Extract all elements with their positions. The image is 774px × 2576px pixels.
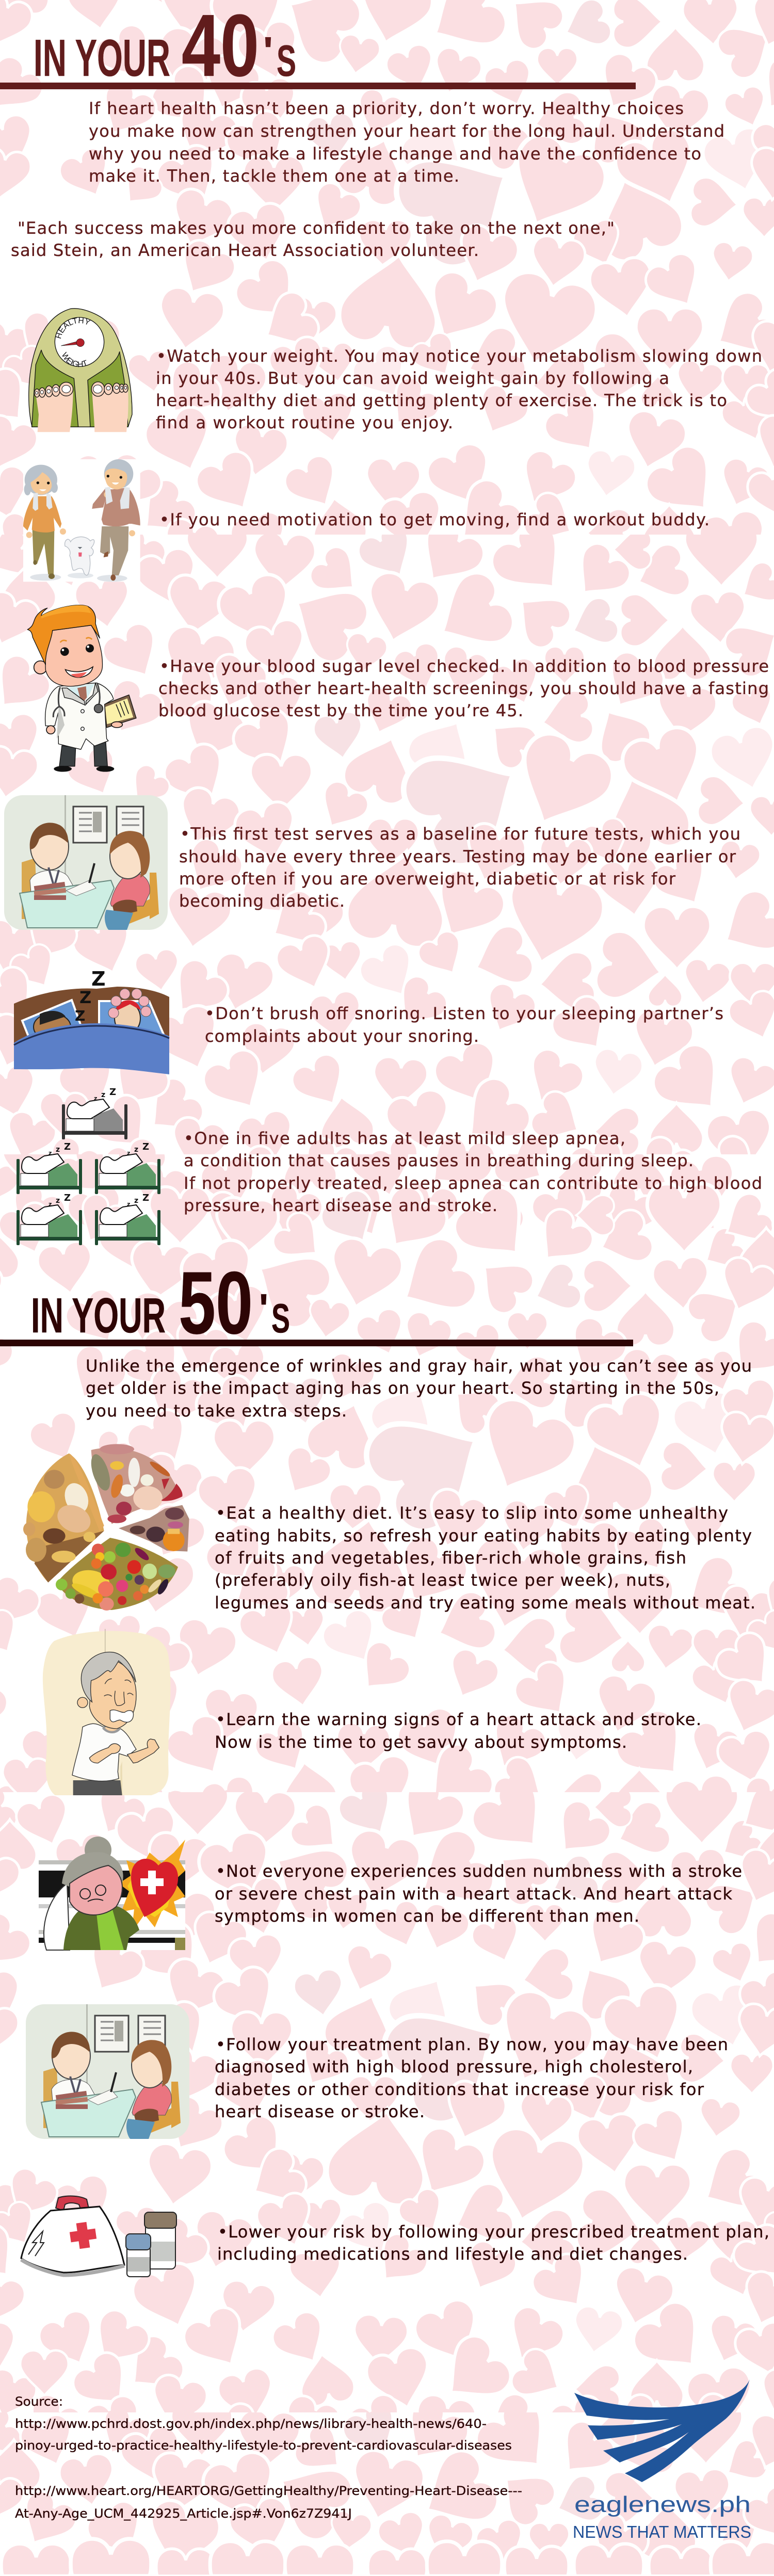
icon: couple in bed, snoring: Z: [91, 968, 106, 990]
text: 50s introduction: [86, 1356, 752, 1421]
heading rule 50s: [0, 1340, 633, 1346]
icon: doctor consultation scene: [4, 795, 168, 930]
text: snoring: [205, 1004, 723, 1046]
text: healthy diet: of fruits and vegetables, fiber-rich whole grains, fish: [215, 1548, 686, 1568]
text: blood sugar: blood glucose test by the time you’re 45.: [158, 701, 523, 720]
text: watch your weight: •Watch your weight. You may notice your metabolism slowing down: [156, 346, 762, 366]
icon: woman with heart pain: [39, 1837, 185, 1950]
text: first test baseline: [179, 824, 740, 911]
logo: eagle news: NEWS THAT MATTERS: [573, 2522, 751, 2541]
text: 40s introduction: [89, 99, 724, 186]
icon: medical kit and pill bottles: [21, 2196, 176, 2277]
text: 40s introduction: why you need to make a lifestyle change and have the confidence to: [89, 144, 701, 164]
text: watch your weight: heart-healthy diet and getting plenty of exercise. The trick is to: [156, 391, 727, 410]
heading: In Your 40's: [34, 0, 296, 95]
text: lower your risk: •Lower your risk by following your prescribed treatment plan,: [218, 2222, 769, 2242]
text: 40s introduction: If heart health hasn’t been a priority, don’t worry. Healthy choices: [89, 99, 684, 118]
icon: healthy weight scale: WEIGHT: [62, 352, 87, 367]
icon: healthy weight scale: [28, 308, 133, 432]
text: Stein quote: "Each success makes you more confident to take on the next one,": [18, 218, 615, 238]
text: healthy diet: (preferably oily fish-at least twice per week), nuts,: [215, 1570, 670, 1590]
text: sleep apnea: pressure, heart disease and stroke.: [184, 1196, 497, 1215]
text: stroke and heart attack symptoms: or severe chest pain with a heart attack. And heart attack: [215, 1884, 732, 1904]
icon: couple in bed, snoring: [14, 968, 169, 1074]
text: healthy diet: eating habits, so refresh your eating habits by eating plenty: [215, 1526, 752, 1545]
text: sleep apnea: a condition that causes pauses in breathing during sleep.: [184, 1151, 694, 1170]
icon: couple in bed, snoring: Z: [79, 988, 91, 1007]
text: stroke and heart attack symptoms: symptoms in women can be different than men.: [215, 1906, 639, 1926]
text: blood sugar: [158, 656, 769, 720]
text: sources: pinoy-urged-to-practice-healthy-lifestyle-to-prevent-cardiovascular-diseases: [15, 2438, 512, 2453]
text: treatment plan: heart disease or stroke.: [215, 2102, 425, 2121]
text: snoring: complaints about your snoring.: [205, 1026, 479, 1046]
heading: In Your 50's: [31, 1253, 290, 1353]
text: 40s introduction: make it. Then, tackle them one at a time.: [89, 166, 459, 186]
text: first test baseline: becoming diabetic.: [179, 891, 345, 911]
text: watch your weight: in your 40s. But you can avoid weight gain by following a: [156, 368, 669, 388]
text: sources: http://www.heart.org/HEARTORG/GettingHealthy/Preventing-Heart-Disease---: [15, 2484, 522, 2498]
text: sleep apnea: If not properly treated, sleep apnea can contribute to high blood: [184, 1173, 762, 1193]
text: first test baseline: more often if you are overweight, diabetic or at risk for: [179, 869, 676, 889]
icon: doctor consultation scene, repeated: [26, 2004, 189, 2139]
text: Stein quote: said Stein, an American Heart Association volunteer.: [11, 240, 479, 260]
text: 50s introduction: get older is the impact aging has on your heart. So starting in the 50s,: [86, 1378, 719, 1398]
heading: In Your 50's: 50: [179, 1253, 253, 1353]
text: 50s introduction: you need to take extra steps.: [86, 1401, 347, 1421]
text: healthy diet: legumes and seeds and try eating some meals without meat.: [215, 1593, 755, 1613]
text: lower your risk: [217, 2222, 769, 2264]
text: sleep apnea: [184, 1129, 762, 1215]
text: sleep apnea: •One in five adults has at least mild sleep apnea,: [184, 1129, 625, 1148]
heading: In Your 40's: IN YOUR: [34, 29, 170, 87]
text: watch your weight: [156, 346, 762, 432]
text: sources: Source:: [15, 2394, 63, 2409]
text: first test baseline: should have every three years. Testing may be done earlier or: [179, 847, 736, 866]
text: warning signs: [215, 1710, 701, 1752]
icon: food groups plate: [23, 1444, 189, 1611]
heading rule 40s: [0, 83, 636, 89]
text: warning signs: Now is the time to get savvy about symptoms.: [215, 1732, 627, 1752]
text: 50s introduction: Unlike the emergence of wrinkles and gray hair, what you can’t see as you: [86, 1356, 752, 1376]
text: sources: At-Any-Age_UCM_442925_Article.jsp#.Von6z7Z941J: [15, 2506, 352, 2521]
icon: couple in bed, snoring: Z: [75, 1007, 85, 1024]
heading: In Your 50's: IN YOUR: [31, 1288, 166, 1343]
text: treatment plan: [215, 2035, 728, 2121]
logo: eagle news: [573, 2379, 751, 2541]
text: sources: http://www.pchrd.dost.gov.ph/index.php/news/library-health-news/640-: [15, 2417, 487, 2431]
text: snoring: •Don’t brush off snoring. Listen to your sleeping partner’s: [205, 1004, 723, 1023]
text: Stein quote: [11, 218, 615, 260]
text: stroke and heart attack symptoms: •Not everyone experiences sudden numbness with a stroke: [216, 1861, 742, 1881]
logo: eagle news: eaglenews.ph: [574, 2492, 751, 2517]
icon: five sleeping figures, one highlighted: [17, 1087, 160, 1245]
text: healthy diet: •Eat a healthy diet. It’s easy to slip into some unhealthy: [216, 1503, 728, 1523]
heading: In Your 40's: ': [263, 29, 273, 72]
text: first test baseline: •This first test serves as a baseline for future tests, which you: [180, 824, 740, 844]
heading: In Your 50's: ': [259, 1285, 268, 1331]
text: blood sugar: checks and other heart-health screenings, you should have a fasting: [158, 679, 769, 698]
icon: man with chest pain: [43, 1629, 170, 1795]
text: warning signs: •Learn the warning signs of a heart attack and stroke.: [216, 1710, 701, 1729]
text: workout buddy: •If you need motivation to get moving, find a workout buddy.: [159, 510, 710, 529]
text: healthy diet: [215, 1503, 755, 1613]
text: 40s introduction: you make now can strengthen your heart for the long haul. Understand: [89, 121, 724, 141]
icon: healthy weight scale: HEALTHY: [56, 318, 91, 339]
text: watch your weight: find a workout routine you enjoy.: [156, 413, 453, 432]
text: stroke and heart attack symptoms: [215, 1861, 742, 1926]
text: treatment plan: diagnosed with high blood pressure, high cholesterol,: [215, 2057, 693, 2076]
icon: doctor with clipboard: [27, 605, 136, 772]
heading: In Your 50's: S: [271, 1295, 290, 1341]
text: lower your risk: including medications and lifestyle and diet changes.: [217, 2244, 688, 2264]
text: treatment plan: diabetes or other conditions that increase your risk for: [215, 2080, 704, 2099]
heading: In Your 40's: S: [277, 37, 296, 86]
icon: walking couple and dog: [23, 459, 140, 582]
text: treatment plan: •Follow your treatment plan. By now, you may have been: [216, 2035, 728, 2054]
icon: eagle wing: [574, 2379, 750, 2482]
text: sources: [15, 2394, 522, 2521]
text: blood sugar: •Have your blood sugar level checked. In addition to blood pressure: [159, 656, 769, 676]
